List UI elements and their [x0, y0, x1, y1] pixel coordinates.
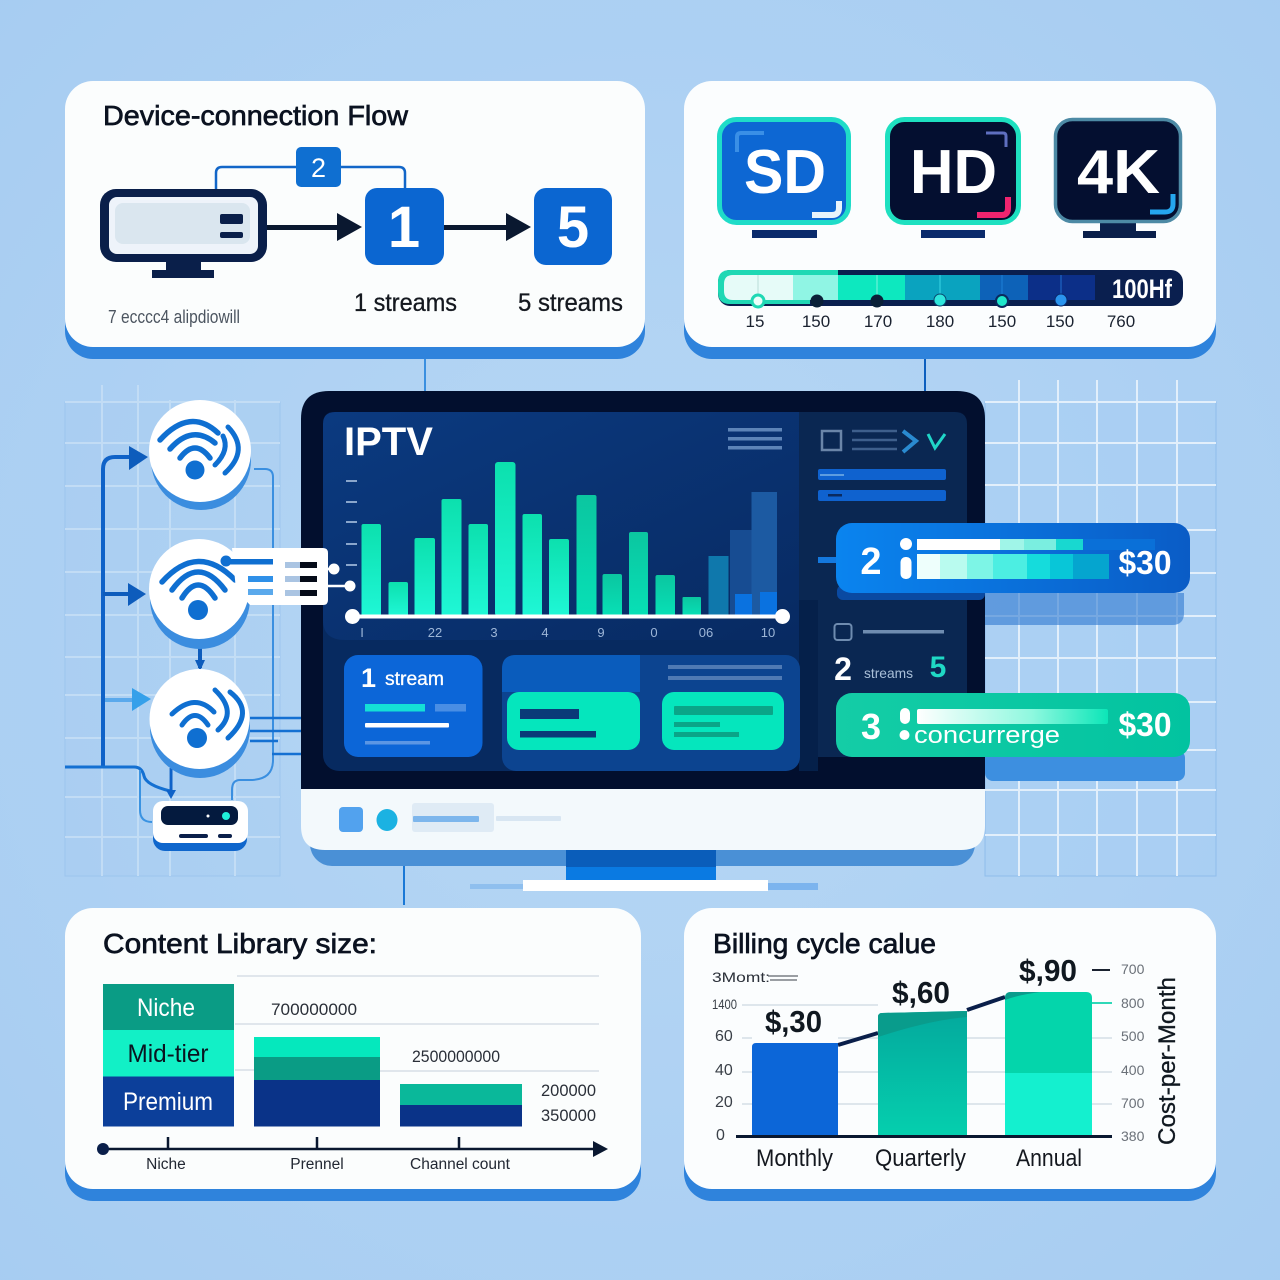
box: 1: 1 [388, 195, 420, 260]
bar: monthly [752, 1043, 838, 1136]
right axis labels: 400 [1121, 1062, 1145, 1078]
lower dashboard panel [323, 600, 799, 771]
icon: wifi node 1 [149, 400, 251, 510]
icon: router [153, 801, 248, 851]
panel: billing cycle value [684, 908, 1216, 1201]
right grid backdrop [985, 380, 1216, 876]
left axis labels: 1400 [712, 996, 737, 1012]
chart panel [323, 412, 799, 640]
legend stack: tiers [103, 984, 234, 1126]
label: 1 streams: 1 streams [354, 289, 457, 317]
right axis labels: 700 [1121, 1095, 1145, 1111]
icon: 4K screen [1056, 120, 1180, 238]
bar chart: 22 [428, 625, 442, 640]
callout: 2 streams $30: 2 [860, 541, 882, 583]
tiles: plan comparison [502, 655, 800, 771]
garbled caption: 7 ecccc4 alipdiowill [108, 307, 240, 327]
axis labels: Prennel [290, 1156, 344, 1173]
panel: device-connection flow [65, 81, 645, 359]
bracket connector with badge 2 [216, 147, 405, 189]
monitor bezel [301, 391, 985, 789]
left axis labels: 20 [715, 1094, 733, 1111]
right axis labels: 800 [1121, 995, 1145, 1011]
tile: green left [507, 692, 640, 750]
legend stack: tiers: Niche [137, 994, 195, 1022]
value labels: 2500000000 [412, 1047, 500, 1066]
box: 1 [365, 188, 444, 265]
tile: 1 stream [344, 655, 482, 757]
heading: IPTV: IPTV [344, 420, 433, 464]
menu icon [728, 428, 782, 450]
value labels: 350000 [541, 1106, 596, 1125]
icon: wifi node 2 [149, 539, 250, 649]
category labels [756, 1145, 1082, 1172]
value labels [271, 1000, 596, 1125]
price labels: $,90 [1019, 953, 1077, 988]
icon: HD screen [888, 120, 1018, 238]
monitor chin [301, 780, 985, 850]
arrow: device to 1 stream [267, 213, 362, 241]
heading: billing cycle value: Billing cycle calue [713, 928, 936, 959]
tile: 1 stream: stream [385, 669, 444, 690]
right axis labels: 500 [1121, 1028, 1145, 1044]
bar chart: I [360, 625, 364, 640]
bitrate scale bar: 100Hf [1112, 274, 1173, 304]
box: 5: 5 [557, 195, 589, 260]
sidebar panel [790, 412, 967, 757]
scale labels: 150 [1046, 312, 1074, 331]
sidebar stream row: 2 [834, 651, 852, 687]
arrow: 1 to 5 [444, 213, 531, 241]
stacked bar: right [400, 1084, 522, 1126]
legend stack: tiers: Premium [123, 1088, 213, 1116]
icon: SD screen: SD [744, 138, 826, 207]
trend line [838, 997, 1005, 1045]
stacked bar: middle [254, 1037, 380, 1126]
tile: green right [662, 692, 784, 750]
scale labels: 150 [988, 312, 1016, 331]
callout: 2 streams $30 [818, 523, 1190, 625]
bar: annual [1005, 992, 1092, 1136]
icon: SD screen [720, 120, 848, 238]
price labels: $,30 [765, 1004, 822, 1039]
bar: quarterly [878, 1011, 967, 1136]
callout: 3 concurrency $30: 3 [861, 706, 881, 747]
bar chart: 0 [650, 625, 658, 640]
flow connectors: wifi devices [65, 446, 301, 822]
box: 5 [534, 188, 612, 265]
connector lines between panels and monitor [404, 347, 925, 905]
scale labels: 170 [864, 312, 892, 331]
heading: content library size: Content Library size: [103, 928, 377, 959]
monitor shadow [310, 800, 975, 866]
heading: device-connection flow: Device-connection Flow [103, 100, 409, 131]
category labels: Monthly [756, 1145, 833, 1172]
icon: device monitor [100, 189, 267, 278]
left axis labels: 0 [716, 1127, 725, 1144]
icon: 4K screen: 4K [1077, 138, 1160, 207]
value labels: 700000000 [271, 1000, 357, 1019]
sidebar stream row [834, 624, 946, 687]
sidebar stream row: streams [864, 665, 913, 681]
baseline [736, 1135, 1112, 1138]
bar chart: 3 [490, 625, 498, 640]
right ticks [1092, 969, 1110, 971]
bar chart: 9 [597, 625, 605, 640]
scale labels [746, 312, 1135, 331]
legend stack: tiers: Mid-tier [128, 1040, 208, 1068]
callout: 2 streams $30: $30 [1118, 544, 1172, 581]
bar chart: 4 [541, 625, 549, 640]
bracket connector with badge 2: 2 [311, 153, 326, 183]
right axis labels: 380 [1121, 1128, 1145, 1144]
scale labels: 150 [802, 312, 830, 331]
left axis labels [712, 996, 737, 1144]
connector card: streams to monitor [220, 548, 356, 605]
right axis labels: 700 [1121, 961, 1145, 977]
legend note [712, 969, 798, 985]
bar chart: 06 [699, 625, 713, 640]
axis labels: Niche [146, 1156, 186, 1173]
category labels: Annual [1016, 1145, 1082, 1172]
left axis labels: 40 [715, 1062, 733, 1079]
monitor stand [470, 850, 818, 891]
bar chart: 10 [761, 625, 775, 640]
callout: 3 concurrency $30: concurrerge [914, 722, 1060, 749]
scale labels: 180 [926, 312, 954, 331]
callout: 3 concurrency $30 [836, 693, 1190, 781]
rotated axis title: Cost-per-Month [1154, 977, 1181, 1145]
sidebar lower left shade [799, 600, 818, 771]
axis labels [146, 1156, 511, 1173]
bitrate scale bar [718, 270, 1183, 308]
price labels: $,60 [892, 975, 950, 1010]
sidebar header icons [822, 431, 945, 452]
axis labels: Channel count [410, 1156, 511, 1173]
callout: 3 concurrency $30: $30 [1118, 706, 1172, 743]
icon: HD screen: HD [910, 138, 997, 207]
price labels [765, 953, 1077, 1039]
scale labels: 15 [746, 312, 764, 331]
icon: wifi node 3 [150, 669, 250, 778]
sidebar stream row: 5 [930, 651, 946, 684]
left grid backdrop [65, 385, 280, 876]
panel: content library size [65, 908, 641, 1201]
value labels: 200000 [541, 1081, 596, 1100]
legend note: 3Momt: [712, 969, 770, 985]
monitor [301, 391, 1190, 891]
scale labels: 760 [1107, 312, 1135, 331]
tile: 1 stream: 1 [361, 663, 376, 693]
right axis labels [1121, 961, 1145, 1144]
sidebar bars [818, 469, 946, 501]
bar chart [345, 462, 790, 640]
category labels: Quarterly [875, 1145, 966, 1172]
panel: resolution tiers [684, 81, 1216, 359]
axis [97, 1137, 608, 1157]
left axis labels: 60 [715, 1028, 733, 1045]
label: 5 streams: 5 streams [518, 289, 623, 317]
